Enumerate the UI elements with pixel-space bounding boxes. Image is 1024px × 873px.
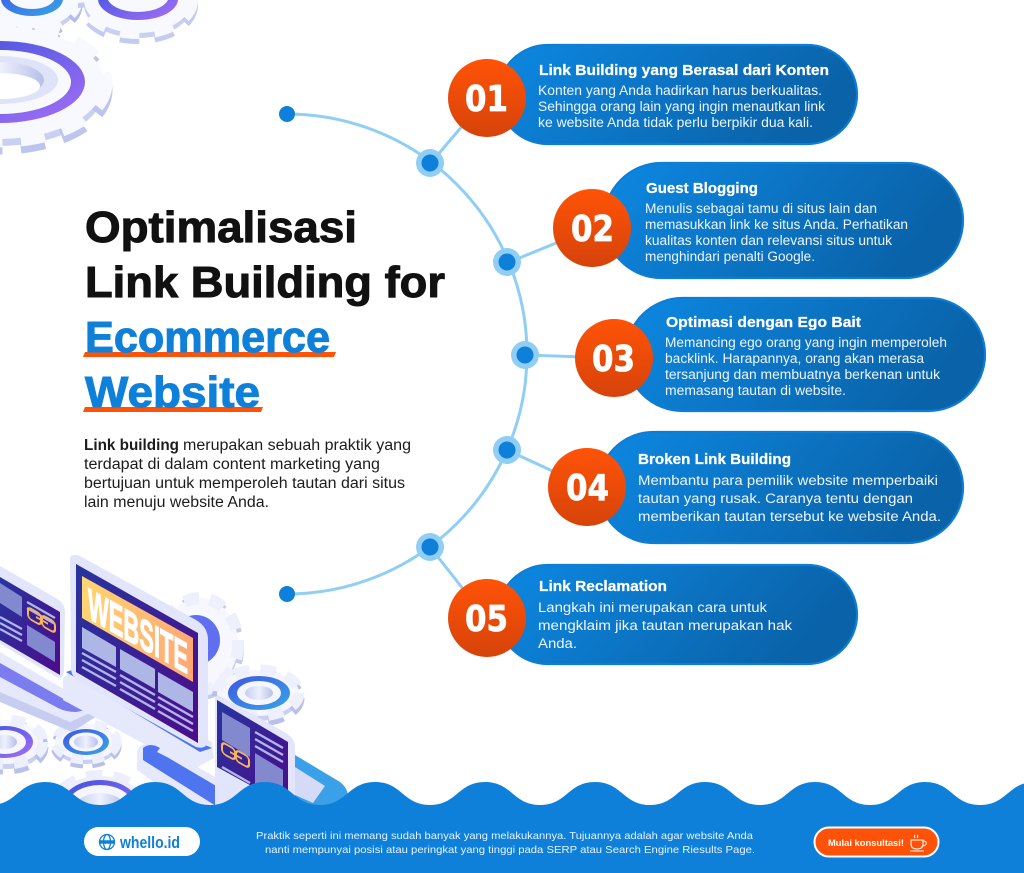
main monitor: [70, 555, 208, 748]
right monitor: [215, 696, 295, 806]
step 05 text: mengklaim jika tautan merupakan hak: [538, 618, 793, 634]
intro paragraph: [84, 437, 411, 511]
logo pill: [84, 827, 200, 856]
step 05 text: Langkah ini merupakan cara untuk: [538, 600, 768, 616]
step 02 text: Menulis sebagai tamu di situs lain dan: [645, 201, 877, 216]
badge 03: 03: [592, 339, 635, 380]
website banner: WEBSITE: [88, 579, 188, 685]
node 4: [493, 436, 521, 464]
icon: chain link left: [28, 607, 55, 633]
badge 02: [553, 189, 631, 267]
step 01: [448, 45, 857, 144]
intro paragraph: terdapat di dalam content marketing yang: [84, 456, 380, 473]
node 1: [416, 149, 444, 177]
step 01 text: Sehingga orang lain yang ingin menautkan link: [538, 99, 825, 114]
left track: [0, 652, 97, 732]
step 01 text: Link Building yang Berasal dari Konten: [539, 62, 829, 79]
footer message: [256, 830, 755, 856]
gear bottom: [56, 776, 144, 836]
step 03 text: memasang tautan di website.: [665, 383, 846, 398]
lower right track: [137, 743, 348, 808]
underline: Website: [83, 407, 263, 412]
icon: coffee cup: [910, 835, 926, 851]
icon: globe: [99, 834, 115, 850]
step 03: [575, 298, 985, 411]
step 02: [553, 163, 963, 278]
arc end dot: [279, 586, 295, 602]
title: [83, 203, 445, 417]
node 3: [511, 341, 539, 369]
consult button: Mulai konsultasi!: [828, 838, 904, 849]
logo pill: whello.id: [119, 834, 180, 852]
step 01 text: ke website Anda tidak perlu berpikir dua kali.: [538, 115, 813, 130]
step 03 text: [665, 314, 947, 398]
intro paragraph: Link building: [84, 437, 179, 454]
step 03 text: Optimasi dengan Ego Bait: [666, 314, 861, 331]
intro paragraph: bertujuan untuk memperoleh tautan dari situs: [84, 475, 405, 492]
step 01 text: [538, 62, 829, 130]
main monitor base: [63, 670, 214, 770]
badge 05: 05: [465, 599, 508, 640]
step 04 text: Broken Link Building: [638, 451, 791, 468]
step 02 text: kualitas konten dan relevansi situs untuk: [645, 233, 892, 248]
step 03 text: tersanjung dan membuatnya berkenan untuk: [665, 367, 940, 382]
step 01 text: Konten yang Anda hadirkan harus berkualitas.: [538, 83, 822, 98]
badge 01: 01: [465, 79, 508, 120]
consult button: [814, 828, 938, 856]
intro paragraph: lain menuju website Anda.: [84, 494, 269, 511]
gear behind main monitor: [162, 598, 238, 694]
step 04 text: [638, 451, 941, 525]
footer message: nanti mempunyai posisi atau peringkat yang tinggi pada SERP atau Search Engine Riesults Page.: [265, 844, 755, 856]
illustration: isometric website monitors: [0, 555, 348, 836]
title: Link Building for: [85, 258, 445, 307]
badge 05: [448, 579, 526, 657]
arc start dot: [279, 106, 295, 122]
underline: Ecommerce: [83, 352, 336, 357]
timeline arc: [279, 98, 613, 618]
decorative gears top left: [0, 0, 192, 146]
step 04: [548, 432, 963, 543]
intro paragraph: merupakan sebuah praktik yang: [183, 437, 411, 454]
left monitor: [0, 566, 65, 678]
node 2: [493, 248, 521, 276]
title: Website: [85, 368, 260, 417]
gear left: [0, 720, 43, 769]
gear centre small: [55, 724, 117, 764]
step 02 text: memasukkan link ke situs Anda. Perhatikan: [645, 217, 908, 232]
gear: top right: [84, 0, 192, 38]
node 5: [416, 533, 444, 561]
footer message: Praktik seperti ini memang sudah banyak yang melakukannya. Tujuannya adalah agar website Anda: [256, 830, 753, 842]
step 03 text: Memancing ego orang yang ingin memperoleh: [665, 335, 947, 350]
badge 01: [448, 59, 526, 137]
step 04 text: Membantu para pemilik website memperbaiki: [638, 473, 938, 489]
icon: chain link right: [222, 742, 249, 768]
title: Ecommerce: [85, 313, 330, 362]
gear right with blue ring: [217, 670, 299, 721]
badge 04: [548, 448, 626, 526]
step 05 text: Link Reclamation: [539, 578, 667, 595]
badge 03: [575, 319, 653, 397]
title: Optimalisasi: [85, 203, 357, 252]
step 02 text: menghindari penalti Google.: [645, 249, 815, 264]
gear: top small: [0, 0, 77, 33]
step 05: [448, 565, 857, 664]
step 04 text: tautan yang rusak. Caranya tentu dengan: [638, 491, 913, 507]
step 03 text: backlink. Harapannya, orang akan merasa: [665, 351, 924, 366]
step 02 text: Guest Blogging: [646, 180, 758, 197]
website banner: [82, 576, 193, 685]
step 05 text: Anda.: [538, 636, 577, 652]
footer band with wave: [0, 782, 1024, 873]
badge 02: 02: [571, 209, 614, 250]
step 05 text: [538, 578, 793, 652]
gear: large: [0, 27, 104, 146]
step 02 text: [645, 180, 908, 264]
step 04 text: memberikan tautan tersebut ke website Anda.: [638, 509, 941, 525]
badge 04: 04: [566, 468, 609, 509]
